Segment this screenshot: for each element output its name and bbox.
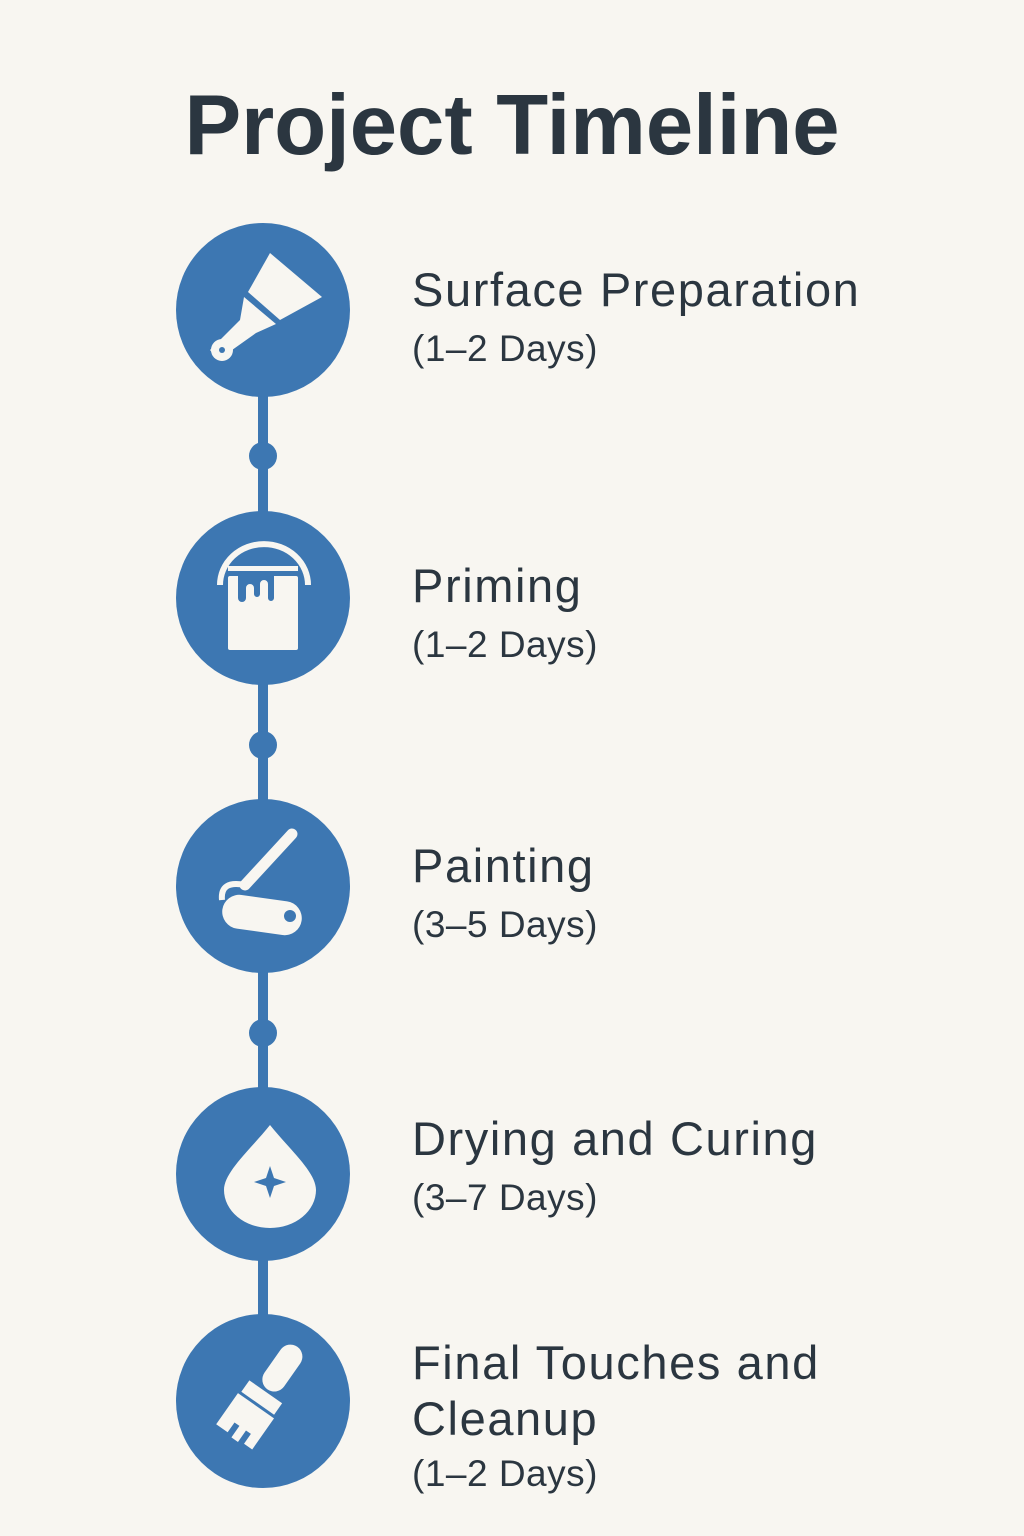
step 5 text: Cleanup: [412, 1392, 598, 1445]
step 5 text: (1–2 Days): [412, 1453, 598, 1494]
step 3 text: (3–5 Days): [412, 904, 598, 945]
icon: roller: [176, 799, 350, 973]
step 4 text: Drying and Curing: [412, 1112, 818, 1165]
step 3 text: Painting: [412, 839, 595, 892]
icon: scraper: [176, 223, 350, 397]
icon: drop: [176, 1087, 350, 1261]
title: Project Timeline: [184, 78, 840, 173]
step 2 text: Priming: [412, 559, 583, 612]
timeline line: [249, 310, 277, 1400]
step 1 text: (1–2 Days): [412, 328, 598, 369]
step 1 text: Surface Preparation: [412, 263, 860, 316]
step 4 text: (3–7 Days): [412, 1177, 598, 1218]
step 5 text: [412, 1336, 820, 1494]
icon: paint bucket: [176, 511, 350, 685]
step 4 text: [412, 1112, 818, 1218]
step 2 text: (1–2 Days): [412, 624, 598, 665]
step 5 text: Final Touches and: [412, 1336, 820, 1389]
icon: brush: [176, 1314, 350, 1488]
step 1 text: [412, 263, 860, 369]
step 3 text: [412, 839, 598, 945]
step 2 text: [412, 559, 598, 665]
